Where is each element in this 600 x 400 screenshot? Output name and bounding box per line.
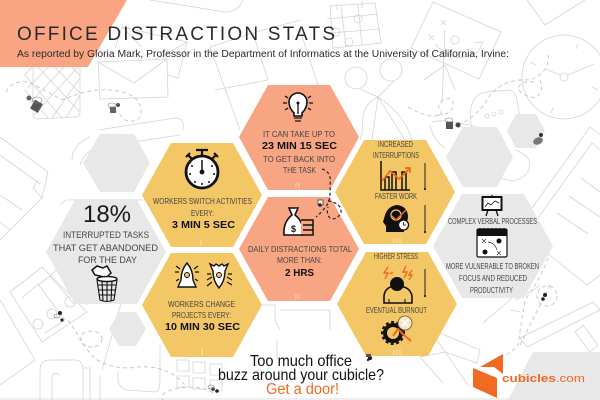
panel: daily distractions: [239, 197, 359, 301]
panel: time to get back: TO GET BACK INTO: [263, 155, 335, 164]
panel: 18 percent abandoned: [46, 200, 166, 304]
panel: workers switch activities: [142, 143, 262, 247]
label: MORE VULNERABLE TO BROKEN: [446, 262, 539, 271]
decorative grey hexagon upper right: [446, 127, 513, 187]
panel: cognitive effects: [433, 194, 553, 298]
panel: workers switch activities: EVERY:: [191, 209, 214, 218]
grey brand backdrop: [508, 352, 600, 400]
arrow: down second: [424, 205, 426, 233]
call to action: Too much office: [250, 353, 352, 370]
panel: interruptions to faster work: INTERRUPTIONS: [373, 151, 419, 160]
arrow: down: [424, 163, 426, 190]
panel: time to get back: [239, 85, 359, 190]
panel: time to get back: 23 MIN 15 SEC: [262, 140, 337, 152]
panel: daily distractions: 2 HRS: [285, 267, 314, 279]
label: WORKERS SWITCH ACTIVITIES: [153, 197, 252, 206]
panel: interruptions to faster work: FASTER WORK: [375, 192, 417, 201]
call to action: buzz around your cubicle?: [218, 367, 384, 384]
stat description: FOR THE DAY: [78, 255, 137, 265]
value: 10 MIN 30 SEC: [165, 321, 240, 333]
icon: money bag and coins: $: [291, 224, 296, 234]
icon: bees: [26, 96, 547, 393]
panel: workers change projects: [142, 253, 262, 357]
icon: stressed person: [384, 266, 412, 303]
stat description: [53, 230, 159, 265]
icon: presentation board: [482, 195, 502, 216]
label: WORKERS CHANGE: [168, 300, 235, 309]
icon: calendar plan: [477, 228, 507, 257]
icon: gear with failing arrow: [382, 316, 412, 344]
label: COMPLEX VERBAL PROCESSES: [448, 217, 537, 226]
panel: stress to burnout: EVENTUAL BURNOUT: [366, 306, 427, 315]
icon: light bulb: [283, 93, 313, 121]
panel: daily distractions: MORE THAN:: [277, 256, 322, 265]
icon: rising chart: [381, 161, 410, 190]
decorative grey hexagon lower left: [109, 312, 146, 346]
black dashed bee trail: [316, 169, 341, 219]
logo: cubicles.com: [473, 354, 585, 398]
panel: cognitive effects: PRODUCTIVITY: [470, 286, 513, 295]
icon: stopwatch: [186, 150, 218, 188]
icon: rockets: [175, 263, 232, 288]
text: IT CAN TAKE UP TO: [263, 130, 335, 139]
top-left corner shape: [0, 0, 127, 67]
stat description: THAT GET ABANDONED: [53, 243, 159, 253]
labels: INCREASED: [378, 140, 413, 149]
title: OFFICE DISTRACTION STATS: [17, 24, 335, 45]
panel: workers change projects: PROJECTS EVERY:: [172, 311, 231, 320]
value: 3 MIN 5 SEC: [172, 219, 235, 231]
stat description: INTERRUPTED TASKS: [63, 230, 149, 240]
subtitle: As reported by Gloria Mark, Professor in the Department of Informatics at the University of California, Irvine:: [17, 49, 509, 60]
icon: head with gears: [383, 205, 408, 232]
call to action: [218, 353, 384, 398]
arrow: down: [424, 269, 426, 297]
icon: waste basket: [92, 266, 117, 302]
panel: interruptions to faster work: [335, 140, 455, 244]
big stat: 18%: [83, 201, 131, 228]
logo: cubicles.com: cubicles .com: [502, 373, 585, 385]
panel: stress to burnout: [337, 252, 457, 356]
panel: cognitive effects: FOCUS AND REDUCED: [459, 274, 527, 283]
labels: HIGHER STRESS: [374, 252, 418, 261]
decorative grey hexagon top right: [507, 114, 545, 148]
panel: time to get back: THE TASK: [283, 166, 317, 175]
decorative grey hexagon upper left: [83, 134, 150, 192]
call to action: Get a door!: [266, 381, 339, 398]
text: DAILY DISTRACTIONS TOTAL: [248, 245, 353, 254]
